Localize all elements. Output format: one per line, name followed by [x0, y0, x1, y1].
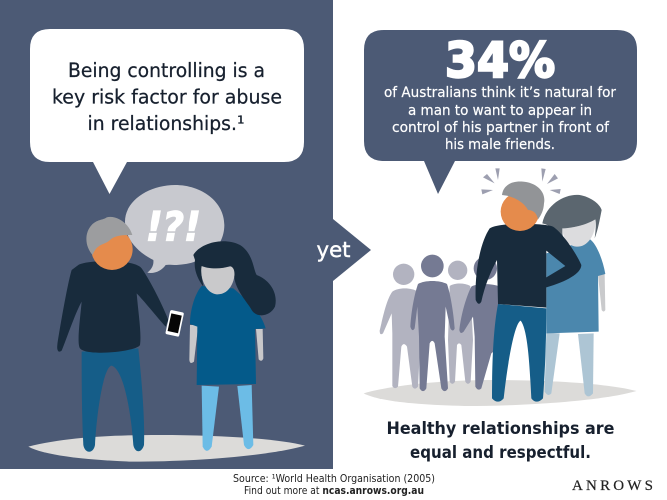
closing message: Healthy relationships are	[386, 419, 614, 438]
source footer: Find out more at ncas.anrows.org.au	[244, 484, 424, 497]
statistic description: control of his partner in front of	[392, 120, 610, 136]
statistic description: a man to want to appear in	[408, 103, 592, 119]
phone	[165, 310, 184, 337]
source footer	[233, 472, 435, 497]
man	[57, 217, 168, 452]
closing message	[386, 419, 614, 462]
callout: controlling risk factor: Being controlling is a	[68, 59, 265, 82]
callout: 34 percent statistic	[364, 30, 637, 194]
callout: controlling risk factor: in relationships.¹	[88, 112, 244, 135]
panel: left background	[0, 0, 333, 469]
illustration: man showing off to friends	[364, 168, 636, 406]
callout: controlling risk factor	[30, 29, 304, 194]
arrow: yet connector	[316, 219, 371, 281]
logo: ANROWS: ANROWS	[572, 478, 653, 494]
emphasis marks	[481, 168, 561, 194]
statistic description: his male friends.	[445, 137, 555, 153]
speech bubble: exclamation	[125, 185, 224, 273]
source footer: Source: ¹World Health Organisation (2005)	[233, 472, 435, 485]
ground shadow	[364, 380, 636, 406]
woman	[189, 241, 276, 451]
callout: controlling risk factor: key risk factor for abuse	[52, 86, 282, 108]
closing message: equal and respectful.	[410, 443, 591, 462]
man	[476, 182, 581, 402]
speech bubble: exclamation: !?!	[146, 205, 201, 251]
ground shadow	[28, 435, 305, 462]
arrow: yet connector: yet	[316, 238, 350, 262]
statistic: 34%: 34%	[445, 33, 555, 89]
statistic description	[384, 85, 616, 153]
group of friends	[380, 255, 500, 391]
woman behind	[542, 195, 605, 396]
statistic description: of Australians think it’s natural for	[384, 85, 616, 101]
illustration: couple with phone	[28, 185, 305, 462]
